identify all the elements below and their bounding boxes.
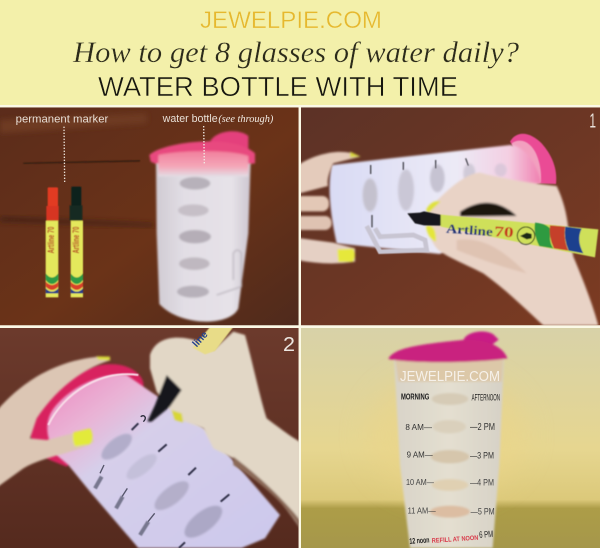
header background <box>0 0 600 105</box>
panel: finished bottle with times: AFTERNOON <box>472 392 500 402</box>
afternoon column: —3 PM <box>470 450 494 460</box>
black marker <box>70 187 83 297</box>
panel: finished bottle with times <box>301 328 600 548</box>
main title: WATER BOTTLE WITH TIME <box>98 71 458 102</box>
panel: step 2, writing the times <box>0 327 300 548</box>
left hand <box>301 150 361 265</box>
pencil ovals and time marks <box>95 416 229 548</box>
right hand and marker <box>147 332 300 528</box>
black marker: Artline 70 <box>71 227 81 253</box>
afternoon column: —4 PM <box>470 478 494 488</box>
right hand holding marker <box>426 173 598 325</box>
bottom line: noon, refill, 6 pm <box>410 530 493 544</box>
marker barrel lettering: line <box>191 329 211 350</box>
water bottle <box>149 131 255 322</box>
afternoon column <box>470 392 500 516</box>
bottom line: noon, refill, 6 pm: REFILL AT NOON <box>432 535 479 545</box>
morning column: 9 AM— <box>407 450 433 460</box>
label: water bottle see through: (see through) <box>218 114 274 125</box>
red marker <box>46 187 59 297</box>
left hand <box>0 356 111 490</box>
wood background <box>0 107 299 325</box>
script subtitle: How to get 8 glasses of water daily? <box>72 36 519 69</box>
bottom line: noon, refill, 6 pm: 6 PM <box>479 529 493 540</box>
brand heading: JEWELPIE.COM <box>200 7 382 34</box>
wood background <box>301 107 600 325</box>
morning column: MORNING <box>401 391 430 401</box>
finished bottle <box>388 332 507 548</box>
watermark on bottle: JEWELPIE.COM <box>400 369 500 385</box>
label: permanent marker <box>16 113 109 183</box>
morning column: 10 AM— <box>406 477 434 487</box>
morning column: 11 AM— <box>408 506 436 516</box>
wood background <box>0 328 299 548</box>
pencil ovals on the bottle <box>363 158 507 252</box>
artline 70 marker: 70 <box>494 224 514 241</box>
pink lid rim <box>29 364 143 467</box>
bottle lid <box>510 134 556 184</box>
morning column <box>401 391 436 516</box>
label: water bottle see through: water bottle <box>162 113 218 125</box>
step number 2: 2 <box>283 333 295 356</box>
bottom line: noon, refill, 6 pm: 12 noon <box>409 535 430 546</box>
red marker: Artline 70 <box>46 227 56 253</box>
afternoon column: —5 PM <box>471 506 495 516</box>
panel: step 1, drawing on the bottle <box>287 107 600 325</box>
label: water bottle see through <box>162 113 274 164</box>
artline 70 marker: Artline <box>446 222 494 239</box>
morning column: 8 AM— <box>405 422 432 432</box>
bottle body on its side <box>330 145 541 254</box>
wall and table background <box>301 328 600 548</box>
marker barrel <box>193 327 233 354</box>
artline 70 marker <box>407 211 598 257</box>
panel: materials, markers and bottle <box>0 107 299 325</box>
label: permanent marker: permanent marker <box>16 113 109 125</box>
bottle body tilted <box>47 375 280 548</box>
afternoon column: —2 PM <box>470 422 495 433</box>
